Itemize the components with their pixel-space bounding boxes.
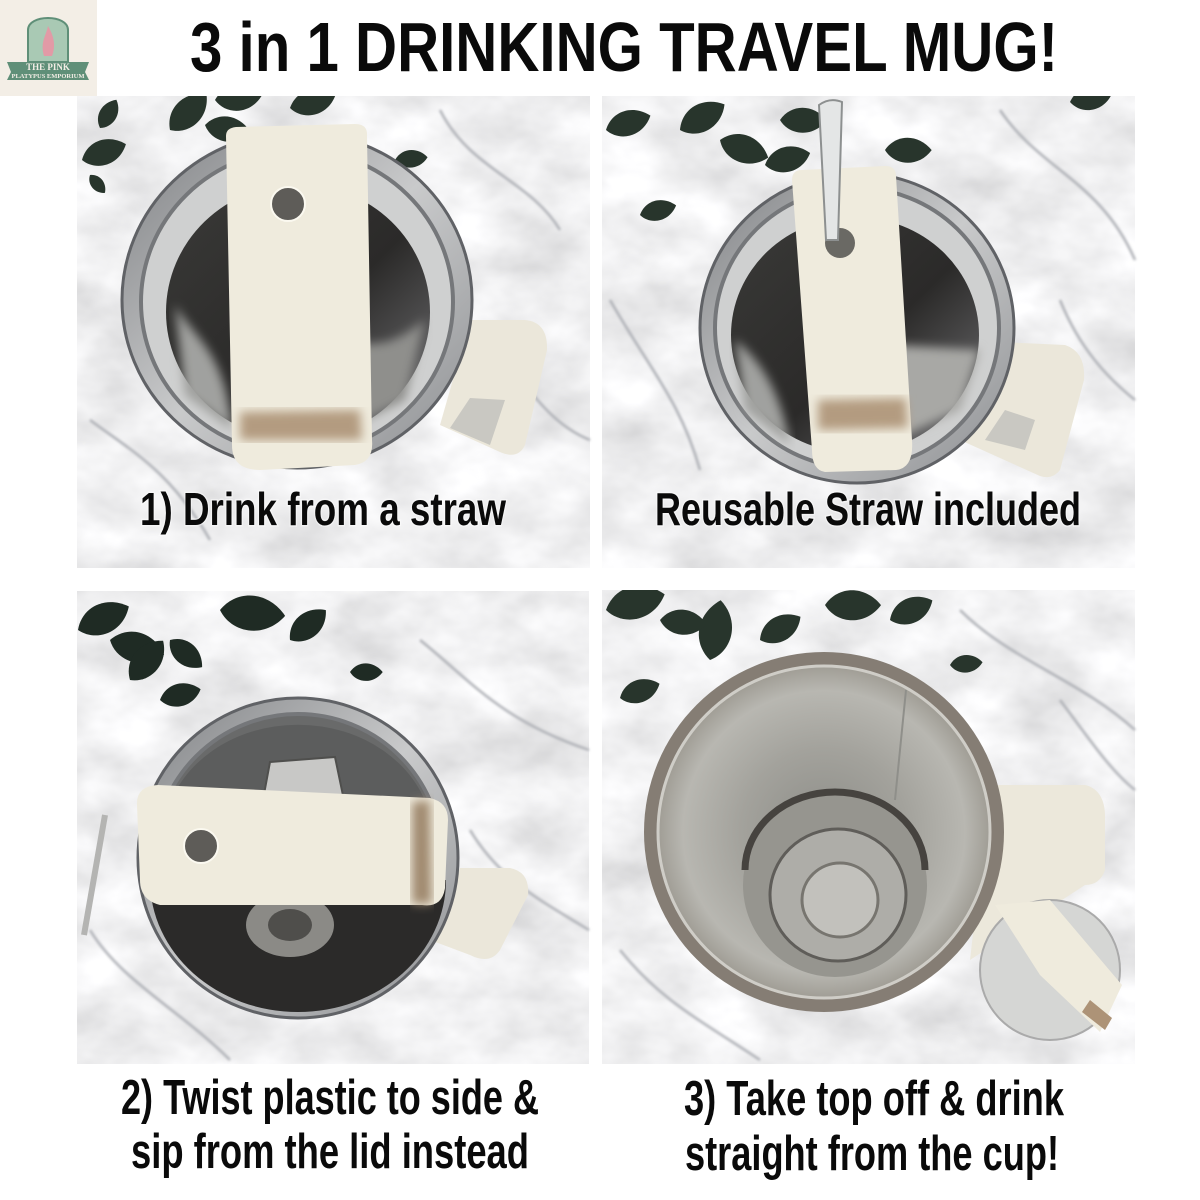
icon: spare straw <box>84 815 105 935</box>
mug handle <box>960 342 1084 477</box>
mug handle <box>430 868 528 959</box>
caption: twist plastic: sip from the lid instead <box>131 1125 529 1179</box>
icon: leaves <box>73 588 384 708</box>
removed lid <box>980 900 1122 1040</box>
panel: drink from the cup <box>602 584 1135 1064</box>
caption: twist plastic: 2) Twist plastic to side & <box>121 1071 539 1125</box>
icon: leaves <box>82 96 428 193</box>
mug handle <box>970 785 1105 960</box>
caption: take top off: straight from the cup! <box>685 1127 1059 1181</box>
logo: The Pink Platypus Emporium: PLATYPUS EMPORIUM <box>11 73 85 80</box>
panel: sip from the lid <box>73 588 589 1064</box>
lid slider <box>792 166 912 472</box>
panel: reusable straw <box>602 87 1135 568</box>
mug handle <box>440 320 547 455</box>
logo: The Pink Platypus Emporium <box>0 0 97 96</box>
logo: The Pink Platypus Emporium: THE PINK <box>26 62 70 72</box>
mug lid <box>122 132 472 468</box>
lid slider <box>137 785 448 905</box>
mug interior <box>644 652 1004 1012</box>
icon: leaves <box>604 584 983 706</box>
mug lid <box>138 698 458 1018</box>
lid slider <box>226 124 372 470</box>
icon: straw <box>819 100 855 258</box>
mug lid <box>700 173 1014 483</box>
panel: drink from a straw <box>77 84 590 568</box>
caption: take top off: 3) Take top off & drink <box>684 1072 1065 1126</box>
caption: take top off <box>684 1072 1065 1181</box>
caption: reusable straw: Reusable Straw included <box>655 483 1081 535</box>
caption: twist plastic <box>121 1071 539 1179</box>
caption: drink from a straw: 1) Drink from a straw <box>140 483 506 535</box>
icon: leaves <box>604 87 1111 222</box>
